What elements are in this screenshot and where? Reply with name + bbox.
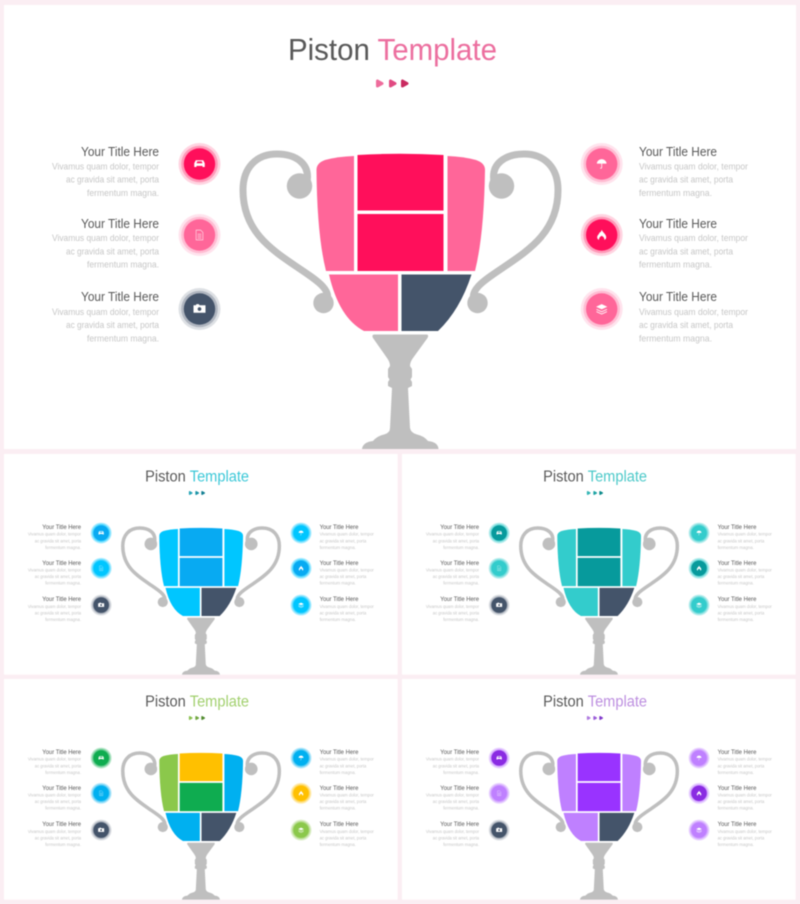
item: right 2: Your Title Here: [320, 560, 359, 567]
item: left 2: Vivamus quam dolor, tempor: [426, 792, 479, 798]
item: left 3: Vivamus quam dolor, tempor: [28, 829, 81, 835]
item: left 2: ac gravida sit amet, porta: [35, 574, 81, 580]
item: right 2: ac gravida sit amet, porta: [718, 799, 765, 805]
item: left 1: Vivamus quam dolor, tempor: [28, 532, 81, 538]
title: Piston Template: [145, 468, 249, 485]
item: left 1: ac gravida sit amet, porta: [433, 763, 479, 769]
title: Piston Template: [543, 693, 647, 710]
item: left 2: Your Title Here: [42, 785, 82, 792]
item: left 2: Vivamus quam dolor, tempor: [28, 567, 81, 573]
icon: camera: [178, 288, 220, 330]
item: right 1: Vivamus quam dolor, tempor: [718, 757, 772, 763]
icon: car: [489, 523, 510, 543]
trophy: [123, 753, 279, 900]
icon: layers: [291, 595, 311, 616]
item: left 2: [426, 783, 510, 811]
item: left 2: [52, 214, 220, 270]
item: right 2: Your Title Here: [320, 785, 359, 792]
icon: document: [489, 783, 510, 804]
item: left 2: [28, 783, 112, 811]
stem: [580, 843, 618, 900]
item: left 2: Your Title Here: [440, 560, 480, 567]
item: right 3: Your Title Here: [718, 821, 757, 828]
item: right 3: [291, 595, 374, 623]
item: left 2: ac gravida sit amet, porta: [433, 799, 479, 805]
item: right 2: Your Title Here: [718, 785, 757, 792]
cup panels: [316, 154, 485, 331]
item: right 1: Vivamus quam dolor, tempor: [718, 532, 772, 538]
item: left 1: Your Title Here: [81, 145, 159, 159]
item: right 2: fermentum magna.: [320, 580, 356, 586]
icon: layers: [689, 595, 709, 616]
title: Piston Template: [288, 32, 497, 67]
item: left 3: fermentum magna.: [45, 617, 81, 623]
icon: car: [489, 748, 510, 768]
item: left 2: [426, 558, 510, 586]
item: left 1: [426, 748, 510, 776]
stem: [182, 843, 220, 900]
item: right 1: Your Title Here: [718, 749, 757, 756]
panel: pink template: [4, 5, 796, 449]
item: right 3: fermentum magna.: [320, 617, 356, 623]
item: left 3: fermentum magna.: [443, 842, 479, 848]
item: left 2: ac gravida sit amet, porta: [433, 574, 479, 580]
item: left 1: Your Title Here: [440, 524, 480, 531]
item: right 1: fermentum magna.: [320, 770, 356, 776]
item: right 3: ac gravida sit amet, porta: [718, 611, 765, 617]
icon: umbrella: [291, 748, 311, 768]
arrows: [190, 492, 204, 494]
icon: umbrella: [581, 143, 623, 185]
item: left 1: [52, 143, 220, 199]
panel: blue template: [4, 454, 398, 675]
item: left 2: fermentum magna.: [87, 260, 159, 270]
handles: [521, 753, 677, 832]
item: left 1: Your Title Here: [42, 749, 82, 756]
icon: layers: [581, 288, 623, 330]
item: left 3: Vivamus quam dolor, tempor: [426, 604, 479, 610]
item: right 3: [689, 820, 772, 848]
cup panels: [557, 528, 641, 616]
icon: umbrella: [689, 748, 709, 768]
item: right 3: [689, 595, 772, 623]
item: right 1: fermentum magna.: [718, 770, 754, 776]
item: right 2: Vivamus quam dolor, tempor: [639, 233, 748, 244]
item: right 2: Vivamus quam dolor, tempor: [718, 792, 772, 798]
item: left 1: fermentum magna.: [443, 770, 479, 776]
item: right 2: Vivamus quam dolor, tempor: [320, 567, 374, 573]
item: left 3: fermentum magna.: [443, 617, 479, 623]
panel: green multicolour template: [4, 679, 398, 900]
stem: [182, 618, 220, 675]
icon: layers: [689, 820, 709, 841]
item: right 2: [291, 783, 374, 811]
item: right 1: fermentum magna.: [718, 545, 754, 551]
item: right 1: Your Title Here: [320, 524, 359, 531]
item: left 3: Vivamus quam dolor, tempor: [426, 829, 479, 835]
icon: camera: [91, 820, 112, 841]
item: right 2: Vivamus quam dolor, tempor: [718, 567, 772, 573]
icon: document: [91, 783, 112, 804]
item: left 2: fermentum magna.: [45, 580, 81, 586]
item: right 3: Vivamus quam dolor, tempor: [718, 604, 772, 610]
item: left 1: [426, 523, 510, 551]
item: right 3: Vivamus quam dolor, tempor: [718, 829, 772, 835]
icon: flame: [291, 558, 311, 579]
item: right 2: fermentum magna.: [718, 805, 754, 811]
icon: umbrella: [291, 523, 311, 543]
item: left 3: ac gravida sit amet, porta: [35, 611, 81, 617]
item: left 3: Your Title Here: [81, 290, 159, 304]
handles: [123, 753, 279, 832]
item: right 1: fermentum magna.: [639, 188, 712, 199]
item: left 3: fermentum magna.: [87, 334, 159, 344]
icon: camera: [489, 595, 510, 616]
stem: [362, 334, 438, 449]
item: left 3: [28, 595, 112, 623]
item: right 1: [689, 748, 772, 776]
item: right 3: Your Title Here: [320, 596, 359, 603]
item: right 1: Your Title Here: [639, 145, 717, 159]
item: right 3: fermentum magna.: [718, 617, 754, 623]
item: left 1: ac gravida sit amet, porta: [35, 538, 81, 544]
item: left 2: fermentum magna.: [45, 805, 81, 811]
panel: teal template: [402, 454, 796, 675]
arrows: [588, 492, 602, 494]
item: right 2: ac gravida sit amet, porta: [718, 574, 765, 580]
item: left 3: [28, 820, 112, 848]
title: Piston Template: [145, 693, 249, 710]
item: left 3: [426, 595, 510, 623]
item: left 1: fermentum magna.: [45, 770, 81, 776]
icon: flame: [291, 783, 311, 804]
item: right 2: ac gravida sit amet, porta: [320, 574, 367, 580]
handles: [123, 528, 279, 607]
item: left 3: ac gravida sit amet, porta: [433, 611, 479, 617]
icon: document: [91, 558, 112, 579]
item: left 1: [28, 523, 112, 551]
item: right 2: ac gravida sit amet, porta: [320, 799, 367, 805]
item: left 2: Vivamus quam dolor, tempor: [426, 567, 479, 573]
panel: purple template: [402, 679, 796, 900]
item: right 3: [291, 820, 374, 848]
item: left 3: Your Title Here: [42, 596, 82, 603]
item: right 3: ac gravida sit amet, porta: [718, 836, 765, 842]
item: left 1: Vivamus quam dolor, tempor: [52, 162, 159, 172]
item: left 3: ac gravida sit amet, porta: [66, 320, 160, 331]
item: left 3: Vivamus quam dolor, tempor: [52, 307, 159, 318]
item: right 1: Your Title Here: [320, 749, 359, 756]
arrows: [588, 717, 602, 719]
item: right 2: ac gravida sit amet, porta: [639, 246, 734, 257]
item: left 1: fermentum magna.: [443, 545, 479, 551]
icon: camera: [489, 820, 510, 841]
item: left 1: Vivamus quam dolor, tempor: [28, 757, 81, 763]
icon: camera: [91, 595, 112, 616]
item: right 1: ac gravida sit amet, porta: [639, 175, 734, 186]
item: right 1: Your Title Here: [718, 524, 757, 531]
icon: flame: [581, 214, 623, 256]
item: left 2: Vivamus quam dolor, tempor: [28, 792, 81, 798]
item: left 2: Your Title Here: [81, 217, 159, 231]
trophy: [521, 528, 677, 675]
stem: [580, 618, 618, 675]
trophy: [521, 753, 677, 900]
item: left 1: Your Title Here: [42, 524, 82, 531]
item: right 1: [689, 523, 772, 551]
item: left 1: [28, 748, 112, 776]
item: left 2: Your Title Here: [440, 785, 480, 792]
item: left 3: Your Title Here: [440, 596, 480, 603]
item: right 2: [689, 783, 772, 811]
item: left 3: fermentum magna.: [45, 842, 81, 848]
icon: document: [489, 558, 510, 579]
item: right 3: fermentum magna.: [718, 842, 754, 848]
item: right 1: ac gravida sit amet, porta: [320, 763, 367, 769]
icon: document: [178, 214, 220, 256]
item: left 2: fermentum magna.: [443, 580, 479, 586]
trophy: [243, 154, 558, 449]
item: right 3: Vivamus quam dolor, tempor: [320, 829, 374, 835]
icon: car: [91, 748, 112, 768]
icon: car: [178, 143, 220, 185]
cup panels: [159, 528, 243, 616]
item: left 3: [52, 288, 220, 344]
arrows: [378, 81, 407, 86]
item: left 3: ac gravida sit amet, porta: [433, 836, 479, 842]
item: left 1: Vivamus quam dolor, tempor: [426, 532, 479, 538]
trophy: [123, 528, 279, 675]
item: right 1: ac gravida sit amet, porta: [718, 538, 765, 544]
item: right 3: fermentum magna.: [639, 334, 712, 344]
item: left 3: Your Title Here: [440, 821, 480, 828]
item: right 3: ac gravida sit amet, porta: [639, 320, 734, 331]
item: left 1: ac gravida sit amet, porta: [35, 763, 81, 769]
item: right 2: Your Title Here: [639, 217, 717, 231]
item: right 3: ac gravida sit amet, porta: [320, 611, 367, 617]
arrows: [190, 717, 204, 719]
icon: layers: [291, 820, 311, 841]
item: left 3: ac gravida sit amet, porta: [35, 836, 81, 842]
item: right 3: fermentum magna.: [320, 842, 356, 848]
item: right 2: Vivamus quam dolor, tempor: [320, 792, 374, 798]
item: right 2: fermentum magna.: [320, 805, 356, 811]
item: left 2: Your Title Here: [42, 560, 82, 567]
item: right 2: fermentum magna.: [639, 260, 712, 270]
item: right 3: Your Title Here: [320, 821, 359, 828]
icon: flame: [689, 558, 709, 579]
item: right 1: [291, 523, 374, 551]
item: left 1: Your Title Here: [440, 749, 480, 756]
title: Piston Template: [543, 468, 647, 485]
icon: car: [91, 523, 112, 543]
item: right 1: fermentum magna.: [320, 545, 356, 551]
item: left 1: fermentum magna.: [45, 545, 81, 551]
item: right 2: [689, 558, 772, 586]
item: right 2: Your Title Here: [718, 560, 757, 567]
item: left 2: [28, 558, 112, 586]
item: left 2: ac gravida sit amet, porta: [66, 246, 160, 257]
cup panels: [557, 753, 641, 841]
item: right 1: Vivamus quam dolor, tempor: [320, 532, 374, 538]
item: left 1: ac gravida sit amet, porta: [66, 175, 160, 186]
item: right 1: [291, 748, 374, 776]
item: right 3: Vivamus quam dolor, tempor: [639, 307, 748, 318]
item: left 3: Your Title Here: [42, 821, 82, 828]
cup panels: [159, 753, 243, 841]
item: left 1: Vivamus quam dolor, tempor: [426, 757, 479, 763]
item: right 2: [291, 558, 374, 586]
item: left 2: Vivamus quam dolor, tempor: [52, 233, 159, 244]
item: left 1: ac gravida sit amet, porta: [433, 538, 479, 544]
item: right 2: [581, 214, 748, 270]
item: right 3: ac gravida sit amet, porta: [320, 836, 367, 842]
handles: [243, 154, 558, 313]
item: right 3: [581, 288, 748, 344]
item: right 1: Vivamus quam dolor, tempor: [320, 757, 374, 763]
item: right 1: ac gravida sit amet, porta: [320, 538, 367, 544]
item: left 2: ac gravida sit amet, porta: [35, 799, 81, 805]
icon: umbrella: [689, 523, 709, 543]
item: right 1: [581, 143, 748, 199]
icon: flame: [689, 783, 709, 804]
item: right 3: Your Title Here: [718, 596, 757, 603]
item: left 1: fermentum magna.: [87, 188, 159, 199]
item: left 3: [426, 820, 510, 848]
item: right 3: Your Title Here: [639, 290, 717, 304]
item: right 3: Vivamus quam dolor, tempor: [320, 604, 374, 610]
item: right 1: ac gravida sit amet, porta: [718, 763, 765, 769]
item: right 1: Vivamus quam dolor, tempor: [639, 162, 748, 172]
item: left 2: fermentum magna.: [443, 805, 479, 811]
item: left 3: Vivamus quam dolor, tempor: [28, 604, 81, 610]
handles: [521, 528, 677, 607]
item: right 2: fermentum magna.: [718, 580, 754, 586]
